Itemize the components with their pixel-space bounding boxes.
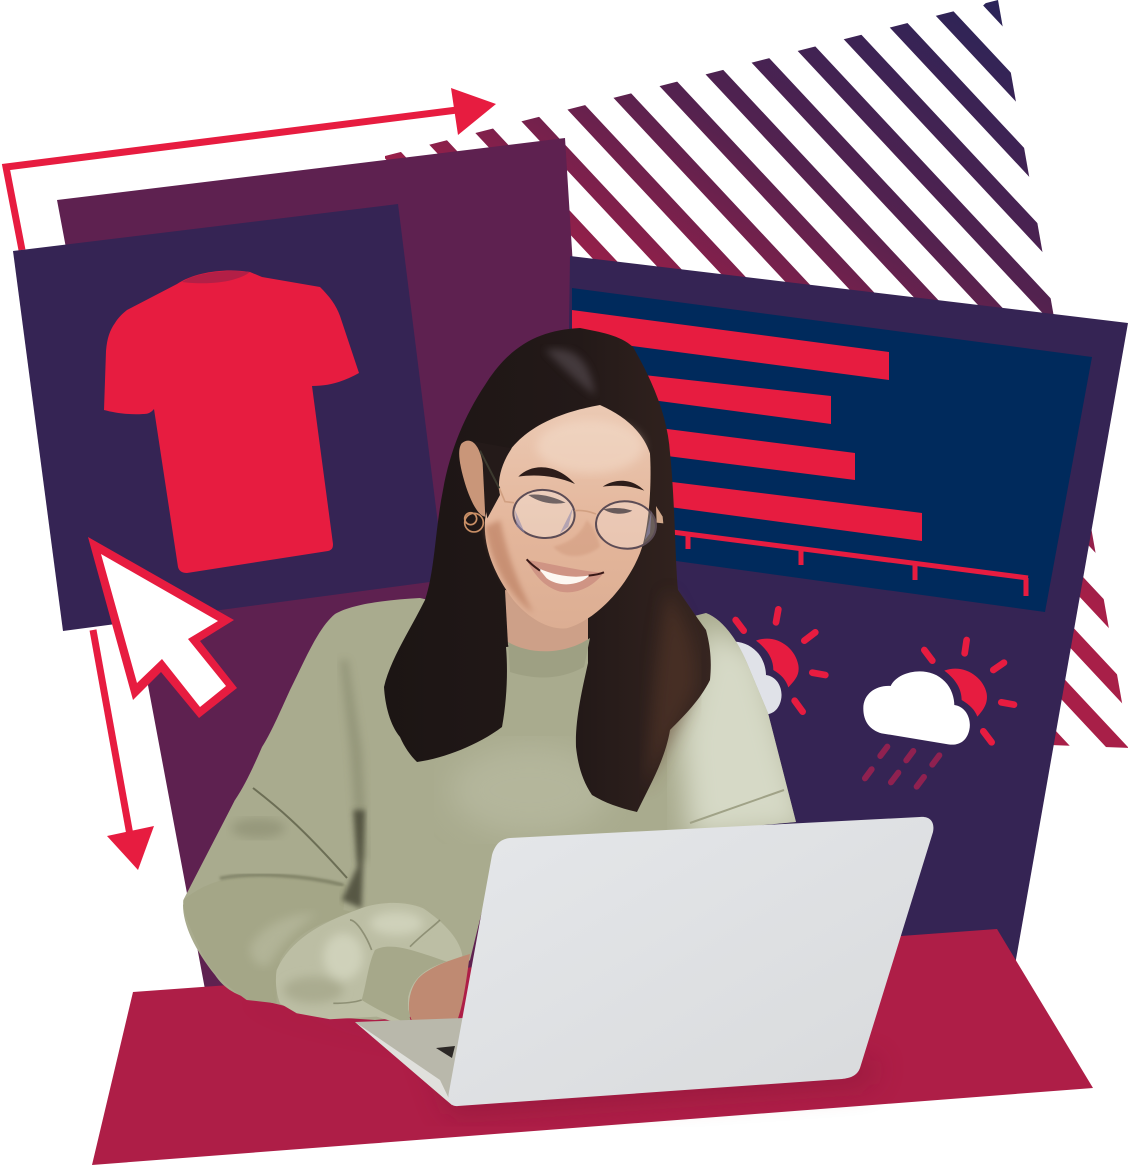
earring (465, 513, 483, 532)
temple hair (475, 442, 512, 518)
sweater shading (253, 625, 810, 878)
torso gap shadow (342, 810, 365, 908)
cuff ribbing (362, 947, 447, 1027)
hair shine (545, 349, 595, 395)
upper arm dark patch (232, 818, 285, 838)
skin (485, 405, 651, 628)
jaw shadow (485, 520, 533, 613)
laptop base (355, 1018, 464, 1105)
arm crease (220, 875, 343, 885)
forehead highlight (537, 420, 643, 473)
neck (505, 590, 588, 652)
nose (553, 520, 600, 556)
eyes (528, 495, 632, 514)
right data panel (560, 256, 1128, 1000)
red arrow down (93, 630, 154, 870)
hand (409, 954, 470, 1022)
weather icon: sun and cloud (675, 609, 825, 715)
red arrow right (6, 88, 496, 250)
sleeve and cuff (183, 800, 470, 1027)
diagonal stripes background (385, 0, 1128, 748)
glasses (480, 451, 663, 551)
table shadow (230, 1000, 880, 1115)
icon: cursor (88, 537, 237, 718)
laptop lid (448, 817, 933, 1106)
weather icon: rain cloud (863, 640, 1014, 787)
large plum panel (57, 138, 700, 1000)
icon: t-shirt (104, 270, 359, 573)
navy product panel (13, 204, 445, 631)
hair (384, 328, 711, 812)
bar chart (572, 288, 1092, 612)
collar (508, 638, 590, 677)
sweater (183, 598, 810, 1020)
face (459, 405, 663, 628)
cuff highlights (283, 912, 423, 1003)
hair highlight right lock (645, 590, 696, 790)
ear (459, 441, 485, 517)
cuff creases (333, 920, 440, 1003)
table surface (92, 929, 1093, 1165)
mouth (527, 559, 604, 592)
sleeve highlights (250, 913, 317, 966)
woman (183, 328, 810, 1020)
upper arm panel (183, 800, 347, 900)
forearm (183, 875, 362, 1003)
cuff (276, 903, 463, 1027)
eyebrows (518, 467, 575, 484)
